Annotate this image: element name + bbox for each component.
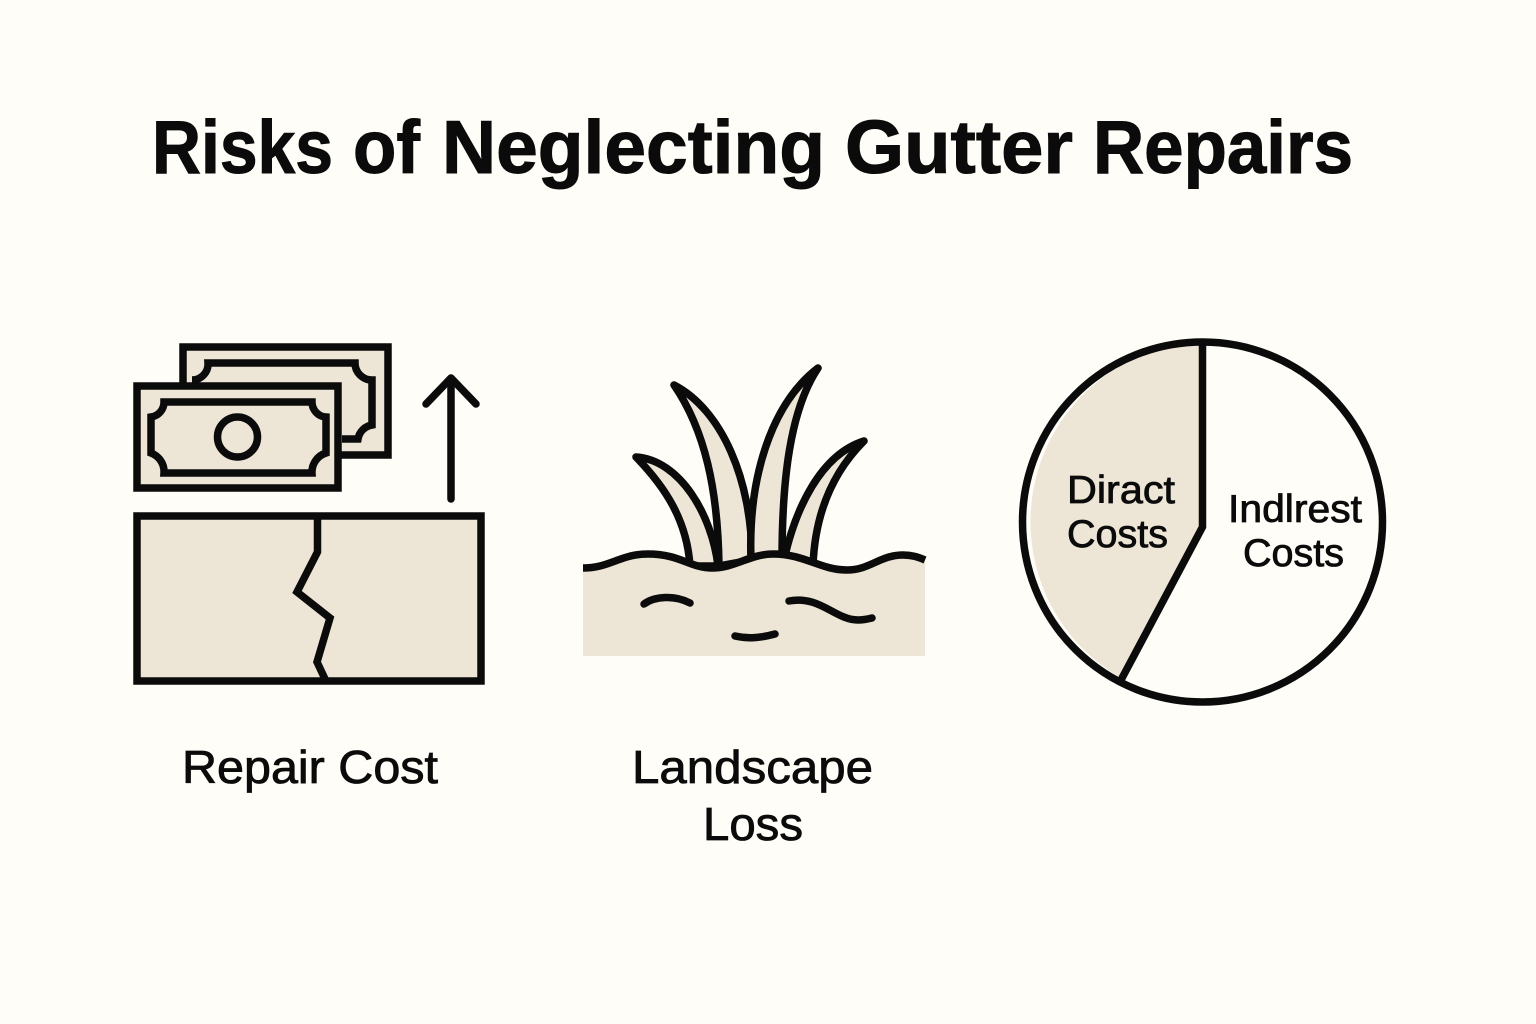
title: of [353, 105, 421, 189]
pie slice: direct costs [1030, 342, 1202, 678]
arrow: rising cost [426, 378, 476, 499]
icon: stacked banknotes [137, 347, 388, 488]
soil marks [644, 597, 872, 638]
ground line [583, 554, 925, 570]
title: Risks [152, 105, 333, 189]
label: indirect costs [1228, 488, 1362, 575]
label: landscape loss: Landscape [632, 741, 873, 793]
title: Gutter [845, 105, 1073, 189]
panel: landscape loss [583, 368, 925, 850]
label: direct costs: Diract [1067, 469, 1175, 512]
grass blades [636, 368, 864, 566]
title: Neglecting [442, 105, 825, 189]
pie chart: direct vs indirect costs [1022, 342, 1382, 702]
label: landscape loss: Loss [703, 798, 803, 850]
panel: repair cost [137, 347, 481, 793]
front banknote [137, 386, 338, 488]
title [152, 105, 1353, 189]
label: direct costs: Costs [1067, 513, 1168, 556]
label: direct costs [1067, 469, 1175, 556]
divider [1121, 342, 1202, 680]
icon: grass and soil [583, 368, 925, 656]
soil [583, 554, 925, 656]
back banknote [183, 347, 388, 455]
label: indirect costs: Costs [1243, 532, 1344, 575]
icon: cracked wall [137, 516, 481, 681]
pie outline [1022, 342, 1382, 702]
pie base: indirect costs [1022, 342, 1382, 702]
label: repair cost: Repair Cost [182, 741, 438, 793]
label: landscape loss [632, 741, 873, 850]
label: indirect costs: Indlrest [1228, 488, 1362, 531]
title: Repairs [1093, 105, 1353, 189]
